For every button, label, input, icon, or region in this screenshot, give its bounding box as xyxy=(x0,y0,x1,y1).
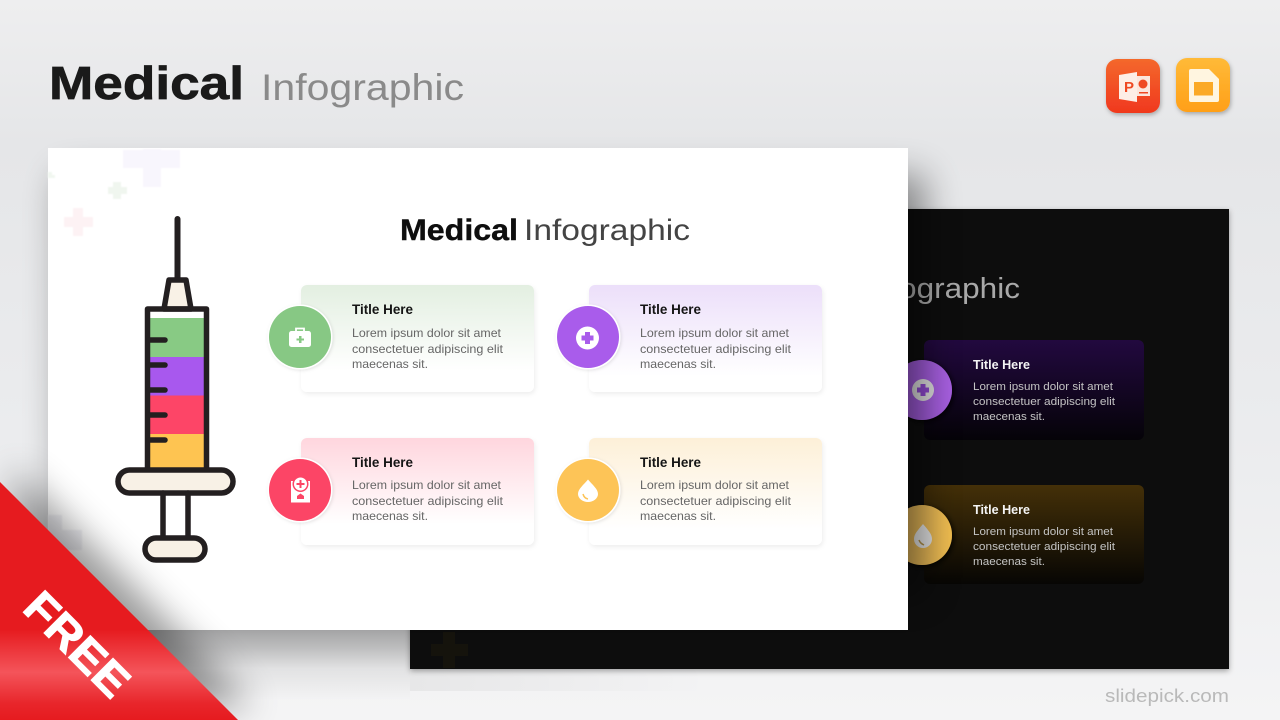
decorative crosses xyxy=(48,149,180,550)
main title: Medical xyxy=(49,57,244,109)
dark card: purple: Lorem ipsum dolor sit amet xyxy=(973,381,1114,393)
white slide right shadow xyxy=(60,175,925,595)
icon: Google Slides xyxy=(1176,58,1230,112)
syringe liquid layers xyxy=(149,318,205,468)
card: green: consectetuer adipiscing elit xyxy=(352,343,504,356)
dark slide heading: Infographic xyxy=(864,273,1020,305)
icon: medical case xyxy=(268,304,332,370)
syringe illustration xyxy=(118,219,233,560)
card: yellow: Lorem ipsum dolor sit amet xyxy=(640,479,790,492)
dark card: yellow: Title Here xyxy=(973,502,1030,517)
card: purple: maecenas sit. xyxy=(640,358,716,371)
main title xyxy=(49,57,464,109)
icon: water drop xyxy=(556,458,620,522)
card: green: Title Here xyxy=(352,302,413,317)
dark card: yellow xyxy=(892,485,1144,584)
card: yellow: consectetuer adipiscing elit xyxy=(640,495,792,508)
card: yellow: maecenas sit. xyxy=(640,510,716,523)
slide heading: Infographic xyxy=(524,214,690,247)
dark card: purple: Title Here xyxy=(973,357,1030,372)
card: pink: Lorem ipsum dolor sit amet xyxy=(352,479,502,492)
slide heading: Medical xyxy=(400,214,518,247)
dark card: purple: maecenas sit. xyxy=(973,411,1045,423)
card: pink: maecenas sit. xyxy=(352,510,428,523)
FREE ribbon: FREE xyxy=(14,581,141,708)
card: yellow xyxy=(556,438,822,545)
ribbon shadow xyxy=(14,468,252,706)
card: purple: consectetuer adipiscing elit xyxy=(640,343,792,356)
icon: plus circle xyxy=(556,304,620,370)
panel: dark slide xyxy=(410,209,1229,669)
slide heading xyxy=(400,214,690,247)
dark card: yellow: Lorem ipsum dolor sit amet xyxy=(973,526,1114,538)
card: green: Lorem ipsum dolor sit amet xyxy=(352,327,502,340)
card: green: maecenas sit. xyxy=(352,358,428,371)
card: purple: Lorem ipsum dolor sit amet xyxy=(640,327,790,340)
main title: Infographic xyxy=(261,67,464,108)
icon: PowerPoint xyxy=(1106,59,1160,113)
FREE ribbon xyxy=(0,482,238,720)
card: pink: Title Here xyxy=(352,455,413,470)
syringe outline xyxy=(118,219,233,560)
card: green xyxy=(268,285,534,392)
icon: medical kit xyxy=(268,458,332,522)
card: purple xyxy=(556,285,822,392)
card: yellow: Title Here xyxy=(640,455,701,470)
card: pink xyxy=(268,438,534,545)
faint shadow below dark slide xyxy=(410,669,710,691)
card: pink: consectetuer adipiscing elit xyxy=(352,495,504,508)
panel: white slide xyxy=(48,148,908,630)
card: purple: Title Here xyxy=(640,302,701,317)
dark card: purple xyxy=(892,340,1144,440)
dark card: yellow: consectetuer adipiscing elit xyxy=(973,541,1116,553)
icon: dark slide cross xyxy=(431,632,468,668)
watermark: slidepick.com xyxy=(1105,685,1229,706)
white slide bottom shadow xyxy=(48,630,410,700)
dark card: purple: consectetuer adipiscing elit xyxy=(973,396,1116,408)
icon: PowerPoint: P xyxy=(1124,79,1134,96)
dark card: yellow: maecenas sit. xyxy=(973,556,1045,568)
